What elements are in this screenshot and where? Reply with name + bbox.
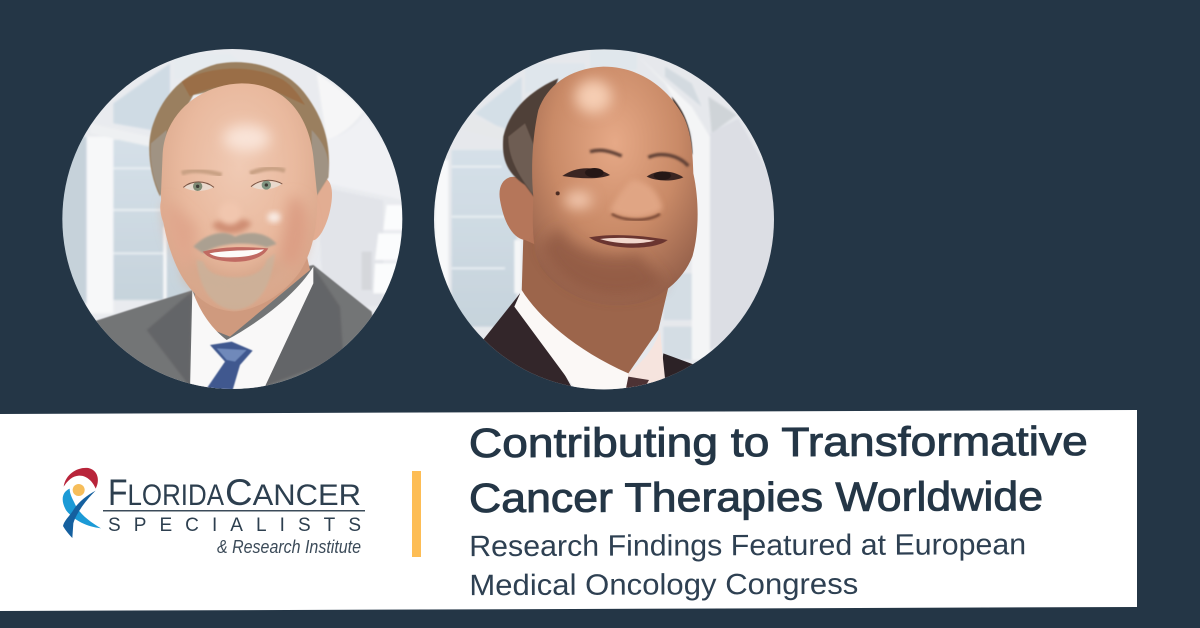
- nose: [211, 212, 252, 235]
- tie: [626, 376, 649, 388]
- logo: Florida Cancer Specialists: [63, 468, 365, 557]
- logo: Florida Cancer Specialists: SPECIALISTS: [108, 515, 361, 536]
- mouth: [589, 235, 668, 248]
- subheading: Research Findings Featured at European: [469, 528, 1026, 563]
- tie: [206, 340, 254, 389]
- logo: Florida Cancer Specialists: & Research Institute: [217, 537, 361, 557]
- cheek shading: [166, 125, 307, 295]
- suit: [93, 265, 383, 393]
- suit: [484, 294, 572, 386]
- subheading: Medical Oncology Congress: [469, 568, 858, 602]
- eyes: [556, 150, 688, 195]
- nose: [610, 180, 662, 220]
- neck: [194, 258, 310, 336]
- face: [161, 83, 317, 311]
- goatee: [193, 233, 277, 310]
- office background: [60, 47, 407, 393]
- logo wordmark: FLORIDA: [108, 472, 224, 513]
- hair: [149, 62, 329, 198]
- highlights and shading: [542, 80, 665, 296]
- gold divider: [412, 471, 421, 557]
- ears: [313, 179, 332, 240]
- mouth: [203, 247, 268, 262]
- portrait: right doctor: [432, 47, 778, 393]
- logo: Florida Cancer Specialists: CANCER: [225, 472, 361, 513]
- portrait: left doctor: [60, 47, 407, 393]
- neck: [522, 237, 672, 373]
- logo icon: ribbon figure: [63, 468, 101, 538]
- white banner: [0, 410, 1137, 611]
- shirt collar: [190, 267, 313, 390]
- ear: [500, 176, 534, 244]
- heading: Cancer Therapies Worldwide: [469, 473, 1043, 521]
- subheading: [469, 528, 1026, 602]
- heading: [469, 418, 1088, 521]
- shirt collar: [514, 290, 628, 393]
- face: [532, 67, 698, 305]
- headline and subheading: [469, 418, 1088, 602]
- heading: Contributing to Transformative: [469, 418, 1088, 466]
- eyes: [182, 168, 285, 191]
- office background: [432, 47, 778, 393]
- hair: [503, 78, 693, 198]
